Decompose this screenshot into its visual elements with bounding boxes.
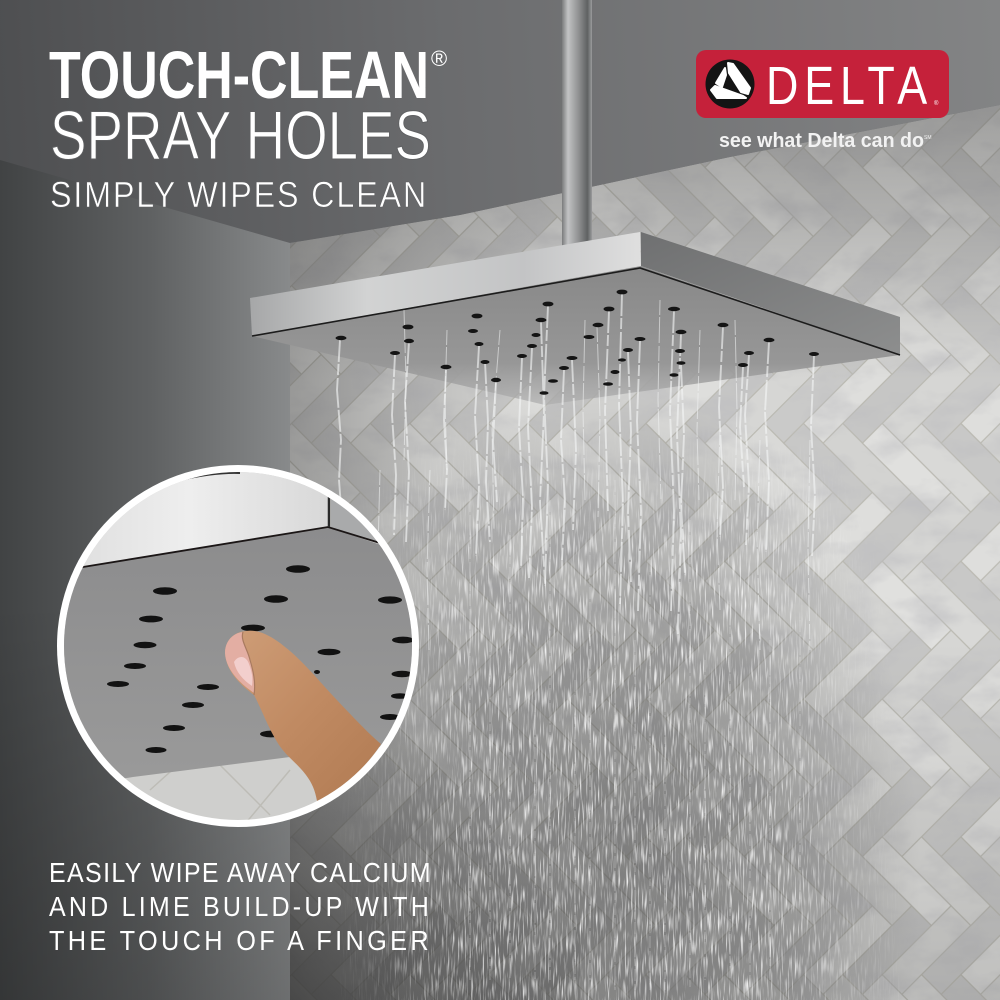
logo: Delta — [696, 50, 949, 152]
subheading: SIMPLY WIPES CLEAN — [50, 174, 428, 215]
lens edge line — [82, 526, 379, 568]
heading: SPRAY HOLES: SPRAY HOLES — [50, 97, 431, 174]
logo red badge — [696, 50, 949, 118]
shower head — [250, 232, 900, 405]
lens vertical edge — [328, 497, 330, 527]
left wall — [0, 0, 300, 1000]
shower head underside plate — [252, 266, 900, 405]
water spray texture — [344, 455, 888, 1000]
lens white ring — [57, 465, 419, 827]
long falling streaks — [470, 480, 800, 990]
lens plate — [64, 528, 412, 778]
nail highlight — [234, 657, 252, 686]
caption text: THE TOUCH OF A FINGER — [49, 925, 432, 956]
bright streaks — [337, 294, 815, 634]
lens front face — [83, 472, 328, 567]
fingernail — [225, 632, 255, 693]
shower head right face — [641, 232, 900, 355]
shower head front face — [250, 232, 641, 336]
finger shadow — [242, 632, 255, 695]
lens top sliver — [180, 473, 240, 480]
ceiling — [0, 0, 1000, 243]
fine streaks — [378, 300, 810, 650]
lens spray holes — [107, 565, 414, 753]
caption text: EASILY WIPE AWAY CALCIUM — [49, 857, 432, 888]
shower head edges — [252, 268, 900, 355]
lens contents — [64, 472, 412, 820]
lens marble tiles — [124, 766, 290, 820]
icon: finger — [225, 631, 381, 801]
tagline service mark: SM — [924, 135, 932, 141]
registered mark: ® — [431, 46, 447, 71]
caption text: AND LIME BUILD-UP WITH — [49, 891, 432, 922]
caption text — [49, 857, 432, 956]
lens right face — [331, 499, 378, 542]
logo registered mark: ® — [934, 100, 939, 107]
icon: Delta emblem — [706, 60, 754, 108]
magnified circle: finger wiping spray holes — [57, 465, 419, 827]
panel: herringbone marble tile wall — [280, 100, 1000, 1000]
water streaks from spray holes — [337, 294, 815, 990]
spray holes — [336, 290, 819, 395]
heading: TOUCH-CLEAN: TOUCH-CLEAN — [49, 38, 429, 113]
shower arm — [562, 0, 592, 246]
logo wordmark: DELTA — [766, 56, 933, 116]
tagline: see what Delta can do — [719, 130, 924, 152]
